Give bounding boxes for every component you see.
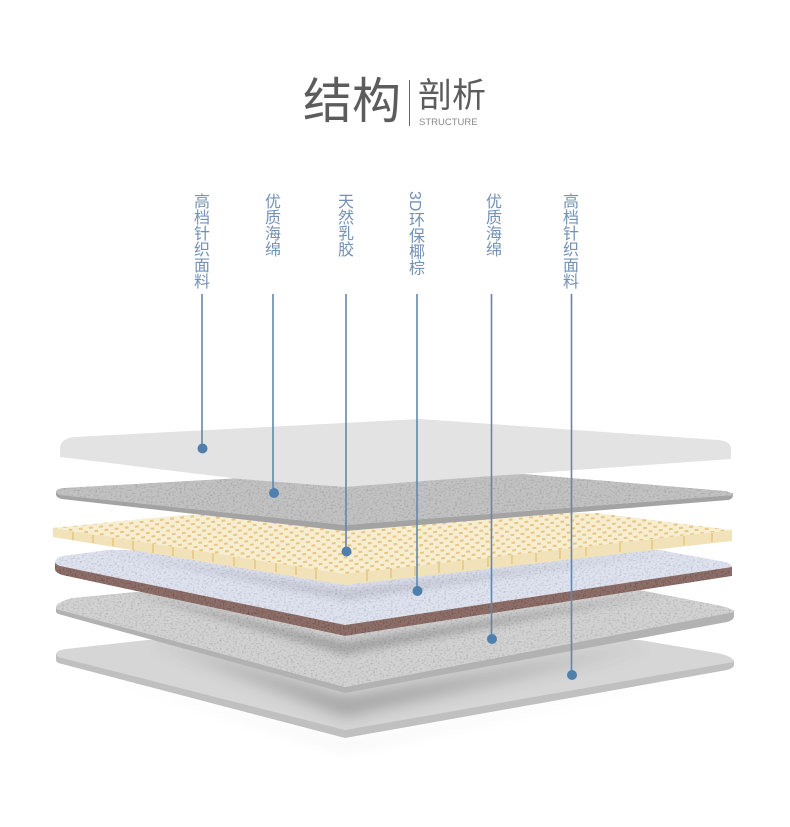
latex side notches bbox=[73, 532, 712, 581]
callout line and marker: lower foam bbox=[487, 294, 497, 644]
title english subtitle: STRUCTURE bbox=[419, 117, 478, 128]
callout line and marker: knitted fabric bbox=[198, 294, 208, 454]
layer 1: top knitted fabric bbox=[60, 419, 731, 487]
callout line and marker: quality foam bbox=[269, 294, 279, 498]
callout line and marker: coconut fibre bbox=[412, 294, 422, 596]
label: 3D eco coconut palm: 3D环保椰棕 bbox=[406, 191, 423, 275]
title secondary characters: 剖析 bbox=[418, 77, 486, 115]
title main characters: 结构 bbox=[303, 75, 401, 129]
layer 2: upper quality foam bbox=[56, 474, 733, 531]
label: quality foam: 优质海绵 bbox=[262, 193, 279, 257]
callout line and marker: latex bbox=[342, 294, 352, 556]
label: natural latex: 天然乳胶 bbox=[335, 193, 352, 257]
label: high-grade knit fabric: 高档针织面料 bbox=[191, 193, 208, 289]
label: high-grade knit fabric lower: 高档针织面料 bbox=[560, 193, 577, 289]
label: quality foam lower: 优质海绵 bbox=[483, 193, 500, 257]
title: structure analysis bbox=[303, 75, 486, 129]
title divider bbox=[409, 80, 410, 126]
layer 3: natural latex bbox=[53, 513, 732, 602]
layer 6: bottom knitted fabric bbox=[56, 640, 734, 738]
latex perforation dots bbox=[54, 513, 732, 574]
layer 4: 3D coconut fibre bbox=[55, 550, 732, 655]
exploded mattress diagram bbox=[53, 294, 734, 738]
layer 5: lower quality foam bbox=[56, 590, 734, 693]
callout line and marker: bottom fabric bbox=[567, 294, 577, 680]
